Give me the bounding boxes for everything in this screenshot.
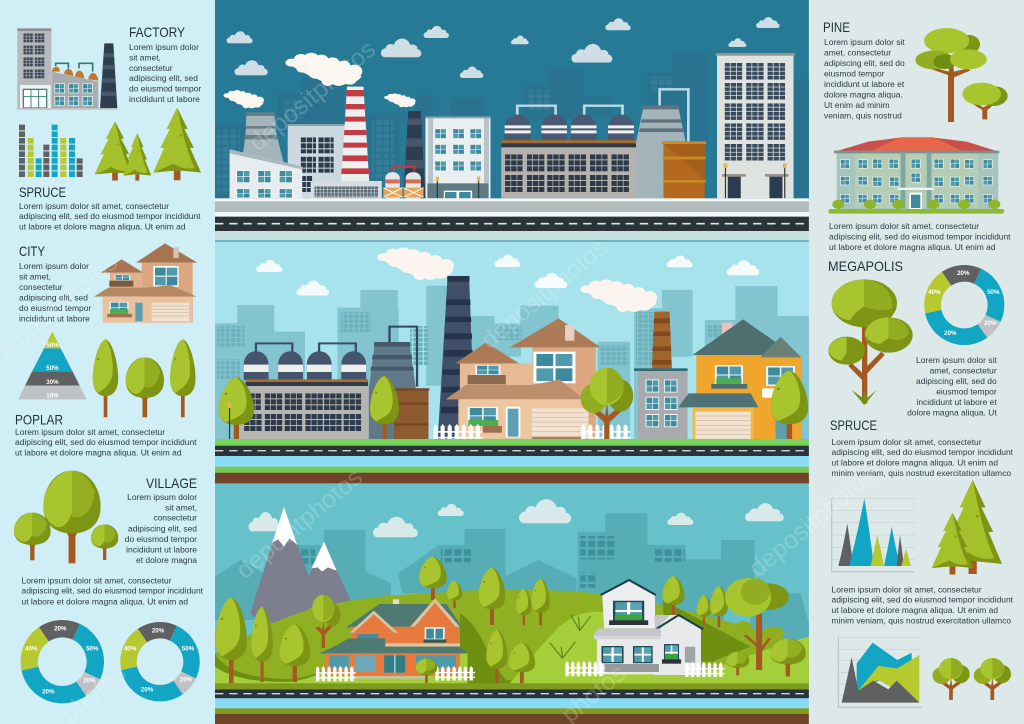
text: village: incididunt ut labore [126, 544, 197, 554]
clouds [227, 17, 780, 78]
fence left [433, 424, 483, 442]
text: pine: dolore magna aliqua. [824, 89, 903, 99]
mountains [250, 507, 352, 623]
grey building [634, 312, 688, 441]
text: lower paragraph: adipiscing elit, sed do eiusmod tempor incididunt [832, 595, 1014, 605]
text: lower paragraph: minim veniam, quis nostrud exercitation ullamco [832, 616, 1011, 626]
chart: donut 3: 20% [957, 270, 970, 277]
icon: pine trees [915, 28, 1008, 122]
chart: donut 3: 50% [987, 289, 1000, 296]
icon: factory [17, 28, 117, 110]
tree by factory [370, 376, 399, 442]
text: factory: do eiusmod tempor [129, 84, 201, 94]
text: spruce: adipiscing elit, sed do eiusmod tempor incididunt [19, 211, 201, 221]
clouds [249, 499, 784, 537]
fence right [581, 424, 631, 442]
text: under building: Lorem ipsum dolor sit amet, consectetur [829, 221, 979, 231]
text: pine: incididunt ut labore et [824, 79, 905, 89]
icon: house [94, 243, 197, 323]
icon: spruce trees [95, 108, 201, 181]
barrel [662, 141, 706, 198]
grass tufts [550, 615, 591, 658]
background skyline [215, 286, 809, 441]
chart: segmented bars [22, 124, 80, 177]
icon: apartment building [828, 137, 1004, 214]
pyramid labels: 10% [46, 392, 59, 400]
panel: village scene [215, 480, 809, 724]
tall tree right [725, 578, 789, 670]
text: megapolis: Lorem ipsum dolor sit [916, 355, 997, 365]
heading: city: CITY [19, 243, 46, 259]
icon: small trees [932, 658, 1011, 700]
text: village: adipiscing elit, sed [128, 523, 197, 533]
chart: donut 2: 20% [141, 687, 154, 694]
heading: village: VILLAGE [146, 475, 197, 491]
text: paragraph above donuts: Lorem ipsum dolor sit amet, consectetur [22, 575, 172, 585]
text: poplar [15, 427, 197, 457]
heading: spruce: SPRUCE [19, 184, 66, 200]
text: spruce [19, 201, 201, 232]
white house [593, 580, 703, 675]
text: megapolis: dolore magna aliqua. Ut [907, 408, 997, 418]
text: pine: eiusmod tempor [824, 68, 885, 78]
text: under building: ut labore et dolore magna aliqua. Ut enim ad [829, 242, 996, 252]
text: village [125, 492, 197, 565]
low annex [311, 181, 382, 198]
grey office [288, 124, 345, 198]
barrel [393, 388, 429, 442]
watermarks: depositphotos [476, 233, 613, 355]
factory [239, 343, 369, 440]
text: spruce right: adipiscing elit, sed do eiusmod tempor incididunt [832, 447, 1014, 457]
text: spruce right: ut labore et dolore magna aliqua. Ut enim ad [832, 458, 998, 468]
chart: pyramid [18, 332, 87, 399]
pyramid labels: 50% [46, 365, 59, 372]
tree near house [580, 368, 633, 441]
cooling tower right [636, 89, 688, 198]
text: factory: Lorem ipsum dolor [129, 42, 199, 52]
hills [215, 590, 809, 683]
text: paragraph above donuts: adipiscing elit, sed do eiusmod tempor incididunt [22, 586, 204, 596]
tree and lamp left [219, 377, 254, 443]
chart: donut 2: 20% [152, 628, 165, 635]
text: under building [829, 221, 1011, 252]
text: city: incididunt ut labore [19, 313, 90, 323]
chart: donut 2 [116, 618, 204, 706]
text: spruce right [832, 437, 1014, 478]
text: factory [129, 42, 201, 104]
panel: city scene [215, 240, 809, 484]
panel gap [215, 231, 809, 240]
dark chimney [403, 111, 425, 198]
striped chimney [341, 87, 369, 182]
text: pine [824, 37, 905, 121]
text: village: et dolore magna [136, 555, 197, 565]
text: factory: sit amet, [129, 52, 161, 62]
chart: area [838, 637, 922, 707]
text: paragraph above donuts: ut labore et dolore magna aliqua. Ut enim ad [22, 596, 188, 606]
panel: factory scene [215, 0, 809, 231]
text: pine: amet, consectetur [824, 47, 891, 57]
heading: megapolis: MEGAPOLIS [828, 258, 903, 274]
small tanks [383, 167, 424, 198]
smoke [377, 247, 657, 312]
icon: spruce pair [932, 480, 1002, 575]
chart: peaks [832, 498, 915, 572]
text: megapolis [907, 355, 997, 418]
clouds [256, 255, 759, 296]
road and pavement [215, 198, 809, 231]
chart: donut 3: 40% [928, 289, 941, 296]
text: poplar: ut labore et dolore magna aliqua. Ut enim ad [15, 447, 182, 457]
cooling tower left [242, 113, 284, 163]
heading: poplar: POPLAR [15, 412, 63, 428]
text: spruce: Lorem ipsum dolor sit amet, consectetur [19, 201, 169, 211]
text: village: consectetur [153, 513, 197, 523]
text: lower paragraph: ut labore et dolore magna aliqua. Ut enim ad [832, 605, 998, 615]
watermarks: depositphotos [744, 461, 881, 583]
chart: donut 2: 40% [124, 646, 137, 653]
icon: large tree [828, 279, 913, 405]
text: spruce right: Lorem ipsum dolor sit amet, consectetur [832, 437, 982, 447]
text: pine: adipiscing elit, sed do [824, 58, 905, 68]
trees left [216, 595, 341, 683]
white factory [230, 149, 302, 198]
house beige [446, 318, 601, 441]
chart: donut 3: 20% [984, 320, 997, 327]
black chimney [438, 276, 476, 440]
brick house [319, 598, 468, 679]
chart: donut 3: 20% [944, 330, 957, 337]
chart: donut 2: 50% [182, 646, 195, 653]
text: lower paragraph: Lorem ipsum dolor sit amet, consectetur [832, 584, 982, 594]
road and ground [215, 683, 809, 724]
trees back [419, 557, 728, 628]
text: factory: adipiscing elit, sed [129, 73, 198, 83]
text: megapolis: eiusmod tempor [936, 387, 997, 397]
small tree [416, 658, 437, 683]
heading: pine: PINE [823, 19, 850, 35]
text: pine: Lorem ipsum dolor sit [824, 37, 905, 47]
chart: donut 1 [16, 616, 108, 708]
chart: donut 1: 20% [54, 626, 67, 633]
watermarks: depositphotos [231, 463, 368, 585]
chart: donut 3 [920, 261, 1008, 349]
chart: donut 2: 20% [180, 677, 193, 684]
heading: spruce right: SPRUCE [830, 417, 877, 433]
text: megapolis: adipiscing elit, sed do [916, 376, 997, 386]
road and ground [215, 439, 809, 484]
chart: donut 1: 40% [25, 646, 38, 653]
text: city: sit amet, [19, 271, 51, 281]
tree right [771, 371, 808, 444]
icon: poplar trees [93, 339, 196, 417]
text: paragraph above donuts [22, 575, 204, 606]
cooling tower [369, 327, 417, 440]
pyramid labels: 50% [46, 342, 59, 349]
panel: right sidebar [809, 0, 1024, 724]
text: village: do eiusmod tempor [125, 534, 197, 544]
text: factory: incididunt ut labore [129, 94, 200, 104]
panel: left sidebar [0, 0, 214, 724]
text: city [19, 261, 91, 323]
text: city: Lorem ipsum dolor [19, 261, 89, 271]
text: spruce right: minim veniam, quis nostrud exercitation ullamco [832, 468, 1011, 478]
fences brick house [316, 666, 475, 681]
trees front [486, 630, 806, 683]
text: village: sit amet, [165, 502, 197, 512]
smoke [223, 53, 416, 108]
fences white house [565, 661, 725, 677]
heading: factory: FACTORY [129, 24, 186, 40]
text: megapolis: amet, consectetur [930, 365, 997, 375]
text: factory: consectetur [129, 63, 173, 73]
text: poplar: Lorem ipsum dolor sit amet, consectetur [15, 427, 165, 437]
background skyline [215, 54, 809, 199]
icon: round trees [14, 471, 118, 563]
text: city: do eiusmod tempor [19, 303, 91, 313]
text: village: Lorem ipsum dolor [127, 492, 197, 502]
background skyline [215, 513, 809, 647]
watermarks: depositphotos [244, 35, 381, 157]
text: pine: veniam, quis nostrud [824, 111, 902, 121]
text: lower paragraph [832, 584, 1014, 626]
text: spruce: ut labore et dolore magna aliqua. Ut enim ad [19, 222, 186, 232]
chart: donut 1: 50% [86, 646, 99, 653]
pyramid labels: 30% [46, 379, 59, 386]
tall tower [716, 53, 795, 198]
text: megapolis: incididunt ut labore et [916, 397, 997, 407]
orange house [678, 319, 802, 442]
text: pine: Ut enim ad minim [824, 100, 890, 110]
chart: donut 1: 20% [83, 678, 96, 685]
big factory [501, 106, 637, 198]
white building [425, 117, 491, 198]
pyramid labels [46, 342, 59, 400]
text: city: adipiscing elit, sed [19, 293, 88, 303]
text: poplar: adipiscing elit, sed do eiusmod tempor incididunt [15, 437, 197, 447]
chart: donut 1: 20% [42, 689, 55, 696]
text: under building: adipiscing elit, sed do eiusmod tempor incididunt [829, 231, 1011, 241]
text: city: consectetur [19, 282, 63, 292]
